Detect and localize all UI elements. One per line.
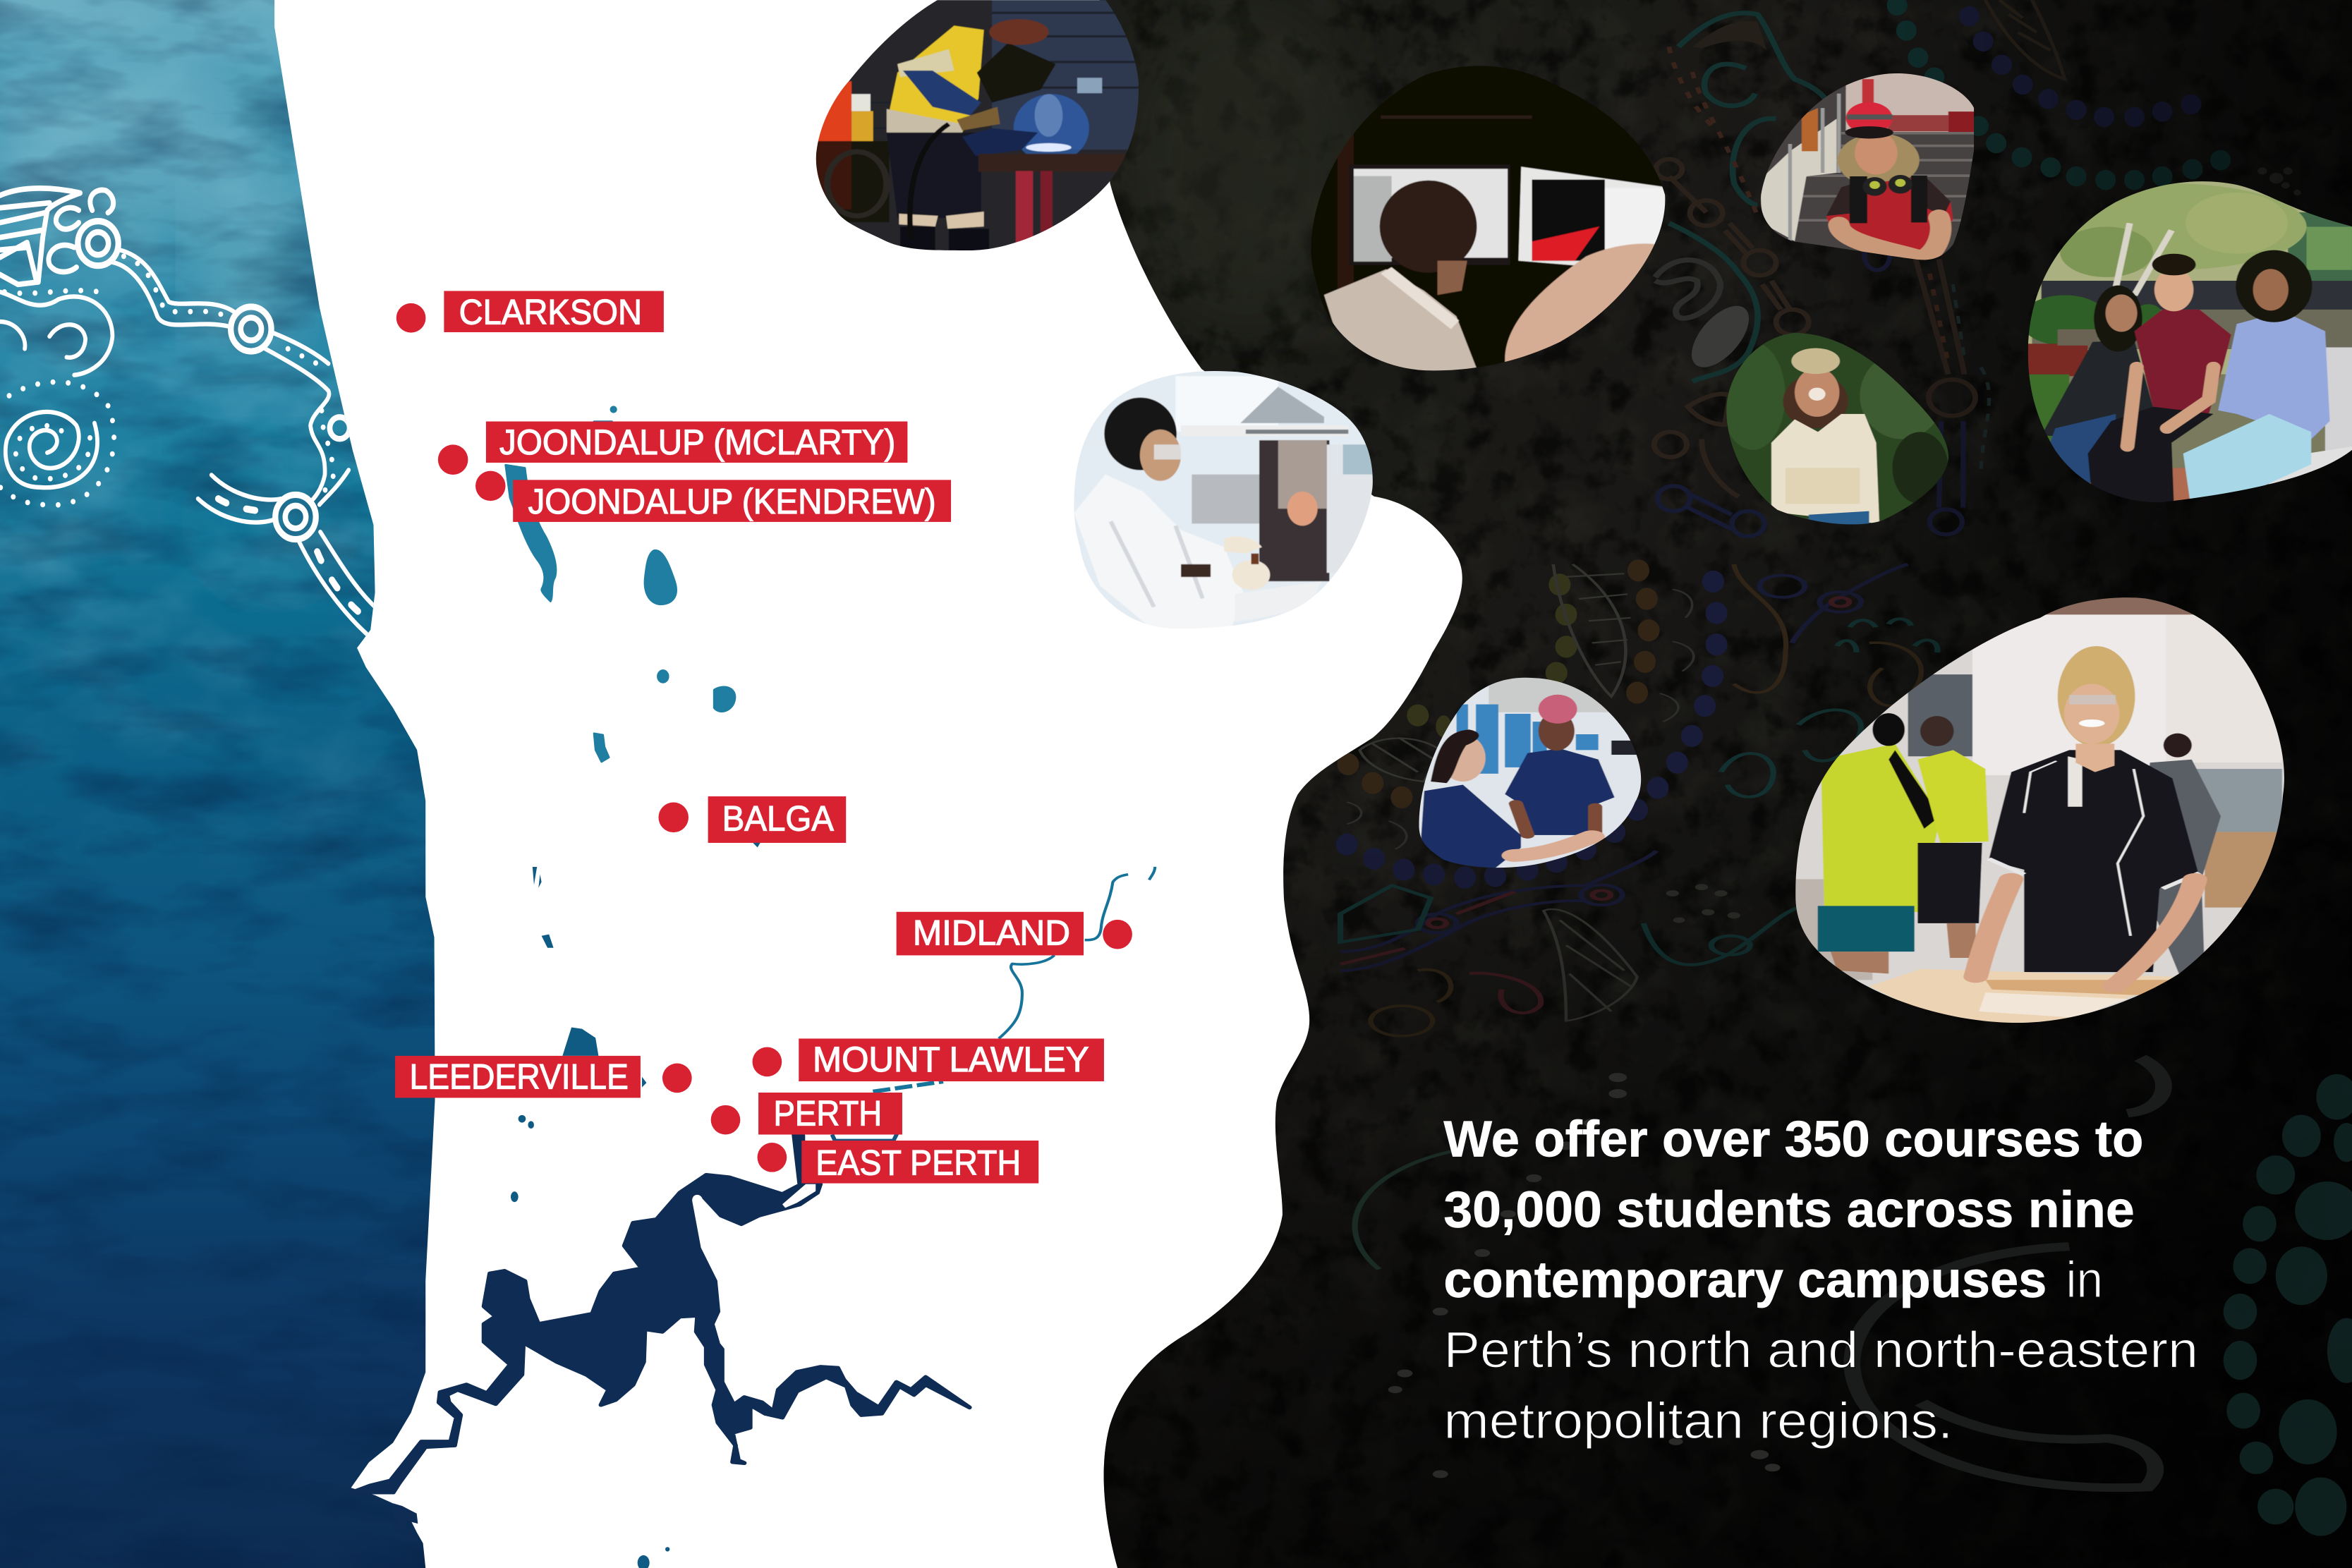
headline statement text: We offer over 350 courses to bbox=[1443, 1111, 2143, 1167]
photo: woodwork student smiling at bench bbox=[1786, 596, 2295, 1027]
lake Joondalup bbox=[506, 465, 556, 602]
northern lakes bbox=[506, 407, 735, 762]
navy dots bbox=[1336, 571, 1728, 889]
MIDLAND marker: MIDLAND bbox=[913, 913, 1070, 953]
olive dots bbox=[1407, 573, 1577, 737]
hatched leaves bbox=[1359, 564, 1637, 1021]
JOONDALUP (KENDREW) marker: JOONDALUP (KENDREW) bbox=[528, 482, 936, 521]
photo: laughing woman in cap bbox=[1721, 327, 1958, 533]
CLARKSON marker: CLARKSON bbox=[459, 292, 642, 332]
upper Swan thin channels bbox=[999, 867, 1155, 1038]
darkening toward the right and bottom bbox=[1080, 0, 2352, 1568]
background dot-art pattern centre bbox=[1336, 559, 1937, 1036]
Herdsman lake bbox=[562, 1027, 598, 1056]
headline statement text: in bbox=[2066, 1252, 2103, 1308]
lake east bbox=[645, 550, 677, 604]
photo: welding bbox=[808, 0, 1154, 257]
CLARKSON marker bbox=[396, 291, 664, 333]
white aboriginal line motif on the ocean bbox=[0, 188, 376, 640]
PERTH marker: PERTH bbox=[774, 1094, 882, 1134]
navy dot chain bbox=[1959, 6, 2201, 127]
BALGA marker bbox=[658, 796, 846, 843]
dark textured panel bbox=[1080, 0, 2352, 1568]
PERTH marker bbox=[711, 1093, 902, 1135]
headline statement text: contemporary campuses bbox=[1443, 1252, 2047, 1308]
large teal dots bbox=[2224, 1074, 2352, 1536]
teal coils bbox=[1340, 619, 1937, 965]
headline statement text bbox=[1443, 1111, 2198, 1450]
headline statement text: 30,000 students across nine bbox=[1443, 1181, 2135, 1238]
BALGA marker: BALGA bbox=[722, 798, 835, 838]
greenish mossy tone top-left bbox=[1125, 4, 1342, 320]
hatched leaf motif top bbox=[1985, 0, 2065, 79]
white island in estuary bbox=[782, 1184, 816, 1208]
navy band with red nodes bbox=[1340, 564, 1908, 971]
photo: two nurses in navy scrubs bbox=[1405, 671, 1656, 873]
headline statement text: Perth’s north and north-eastern bbox=[1443, 1323, 2198, 1379]
campus ring nodes bbox=[78, 221, 350, 540]
map water: lakes and rivers bbox=[352, 407, 1155, 1568]
shell motif bbox=[0, 188, 114, 284]
photo: lab technician in white coat bbox=[1067, 367, 1381, 637]
photo: three students on a bench bbox=[2020, 176, 2352, 508]
teal and brown line work bbox=[1669, 13, 1830, 382]
big pale C outline bbox=[1852, 1058, 2164, 1488]
campus markers bbox=[395, 291, 1132, 1184]
photo: student in red beanie on stairs bbox=[1753, 68, 1981, 267]
MIDLAND marker bbox=[897, 912, 1132, 955]
headline statement text: metropolitan regions. bbox=[1443, 1393, 1953, 1450]
background dot-art pattern upper right bbox=[1654, 0, 2301, 536]
EAST PERTH marker: EAST PERTH bbox=[816, 1143, 1021, 1183]
LEEDERVILLE marker: LEEDERVILLE bbox=[409, 1057, 629, 1097]
ocean panel bbox=[0, 0, 450, 1568]
track bands with dots bbox=[0, 250, 376, 640]
background motif lower right with large teal dots bbox=[1355, 1058, 2352, 1536]
MOUNT LAWLEY marker: MOUNT LAWLEY bbox=[813, 1040, 1089, 1079]
teal dot chain bbox=[1887, 0, 2231, 190]
JOONDALUP (KENDREW) marker bbox=[475, 471, 951, 522]
brown dots bbox=[1337, 559, 1660, 808]
JOONDALUP (MCLARTY) marker: JOONDALUP (MCLARTY) bbox=[499, 423, 895, 462]
photo: engineer at computer monitors bbox=[1295, 56, 1683, 384]
Peel islets at river mouth bbox=[394, 1503, 420, 1541]
Swan river and estuary bbox=[352, 867, 1155, 1541]
JOONDALUP (MCLARTY) marker bbox=[438, 421, 907, 475]
estuary shape bbox=[352, 1135, 969, 1493]
